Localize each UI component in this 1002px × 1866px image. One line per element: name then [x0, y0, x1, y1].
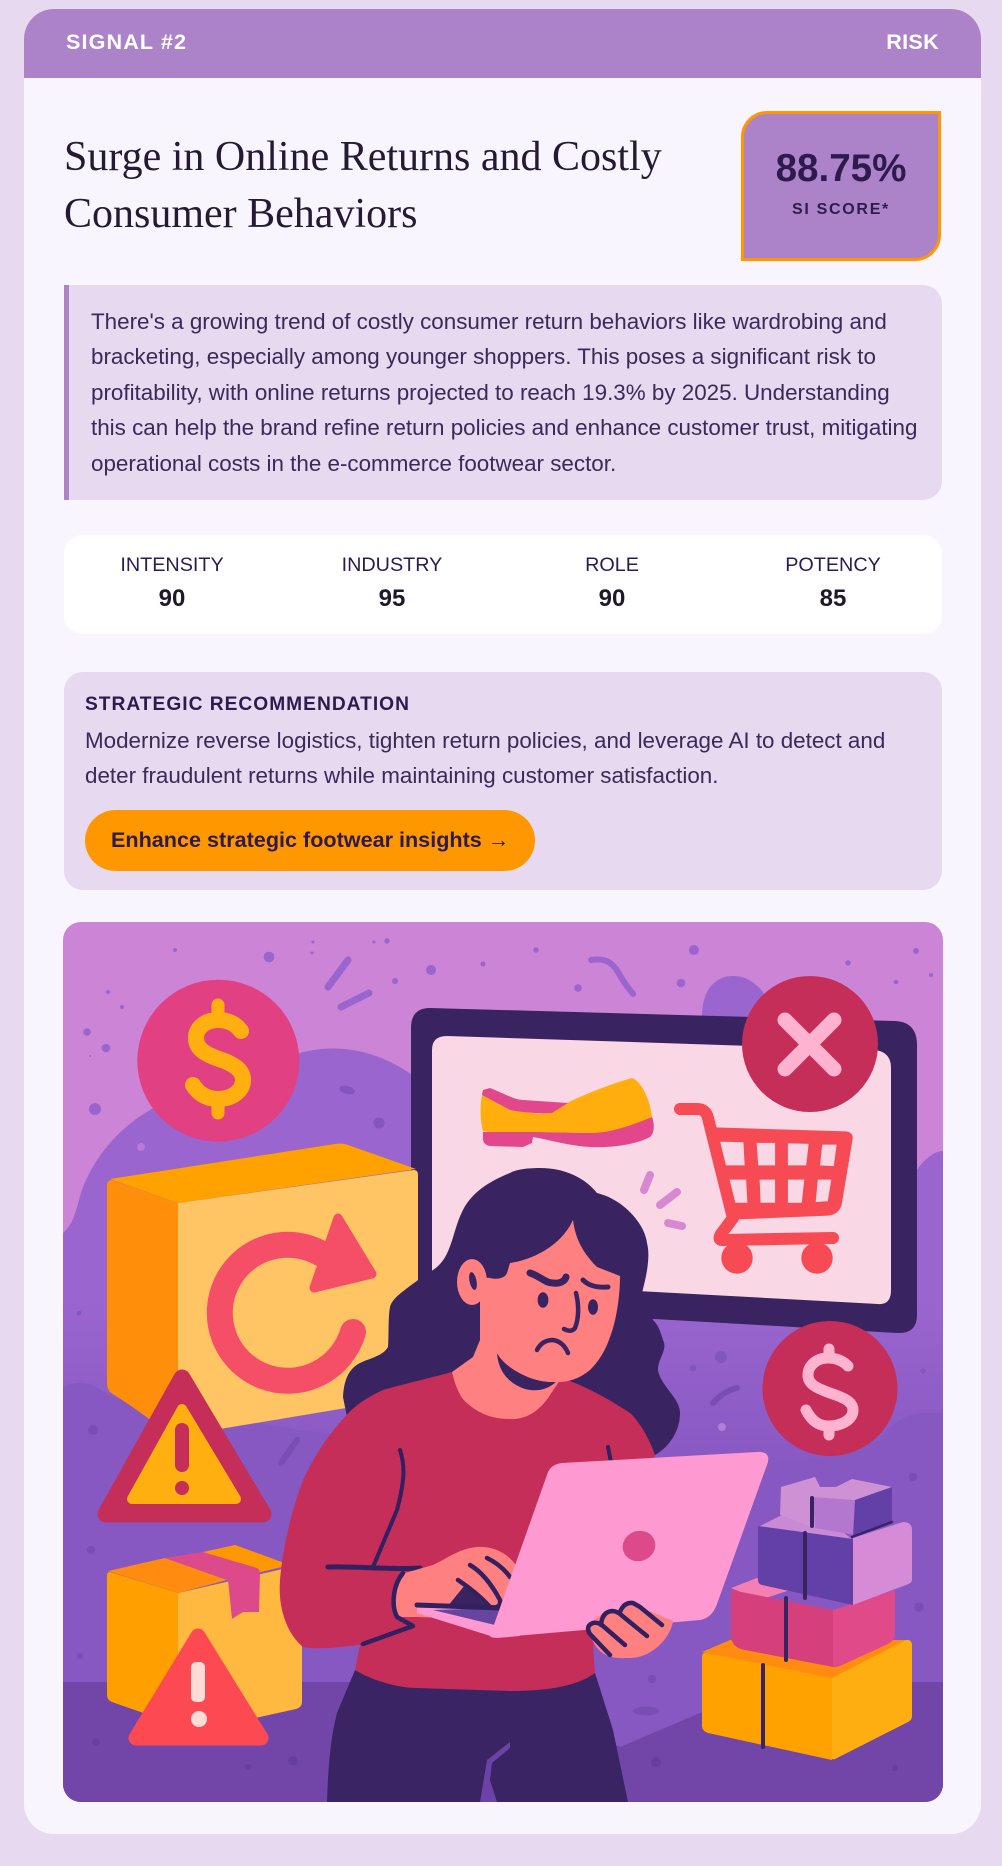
left hand — [394, 1547, 520, 1620]
icon: warning triangle crimson — [106, 1378, 263, 1514]
score label: SI SCORE* — [792, 201, 890, 218]
header bar — [24, 9, 981, 78]
stat: industry — [342, 554, 442, 612]
button label: Enhance strategic footwear insights → — [111, 827, 509, 852]
stat: industry: INDUSTRY — [342, 554, 442, 576]
stat: intensity: 90 — [159, 585, 185, 612]
stat: industry: 95 — [379, 585, 405, 612]
stat: role: 90 — [599, 585, 625, 612]
speckles — [77, 938, 933, 1771]
icon: warning triangle red — [136, 1636, 261, 1738]
stat: potency: POTENCY — [785, 554, 881, 576]
parcel box with tape — [107, 1545, 302, 1735]
stat: role — [585, 554, 639, 612]
icon: shoe — [481, 1078, 654, 1147]
description text: There's a growing trend of costly consumer return behaviors like wardrobing and — [91, 309, 887, 334]
facial features — [530, 1273, 608, 1353]
description panel — [64, 285, 942, 500]
stat: potency: 85 — [820, 585, 846, 612]
icon: dollar coin crimson — [762, 1321, 898, 1456]
stat: intensity: INTENSITY — [120, 554, 224, 576]
stacked boxes — [702, 1477, 912, 1760]
title: Surge in Online Returns and Costly — [64, 134, 662, 180]
box with return arrow — [107, 1144, 418, 1440]
icon: dollar coin pink — [137, 980, 299, 1142]
header label: category: RISK — [886, 29, 939, 54]
stat: potency — [785, 554, 881, 612]
call-to-action button — [85, 810, 535, 871]
description text: bracketing, especially among younger shoppers. This poses a significant risk to — [91, 344, 876, 369]
pants — [327, 1670, 628, 1802]
pink box — [731, 1578, 895, 1667]
score value: 88.75% — [776, 147, 906, 190]
recommendation heading: STRATEGIC RECOMMENDATION — [85, 694, 410, 715]
neck — [452, 1306, 558, 1420]
laptop keyboard — [417, 1585, 520, 1638]
purple box — [758, 1510, 912, 1605]
icon: return arrow — [220, 1218, 372, 1381]
score badge — [741, 111, 941, 261]
left fingers — [363, 1558, 510, 1644]
recommendation text: Modernize reverse logistics, tighten return policies, and leverage AI to detect and — [85, 728, 885, 753]
recommendation text: deter fraudulent returns while maintaining customer satisfaction. — [85, 763, 718, 788]
stat: role: ROLE — [585, 554, 639, 576]
illustration — [63, 922, 943, 1802]
sweater lines — [328, 1447, 611, 1569]
yellow box — [702, 1640, 912, 1760]
description text — [91, 309, 917, 476]
description text: operational costs in the e-commerce footwear sector. — [91, 451, 616, 476]
ear — [457, 1259, 487, 1305]
stats panel — [64, 535, 942, 634]
description text: profitability, with online returns projected to reach 19.3% by 2025. Understanding — [91, 380, 890, 405]
sparks — [644, 1175, 682, 1226]
small box — [780, 1477, 892, 1537]
face — [480, 1220, 620, 1382]
right hand — [588, 1603, 673, 1658]
header label: signal number: SIGNAL #2 — [66, 29, 187, 54]
recommendation panel — [64, 672, 942, 890]
icon: X circle — [742, 976, 878, 1112]
sweater — [280, 1372, 655, 1691]
background — [63, 922, 943, 1802]
monitor — [411, 1008, 917, 1333]
laptop lid — [490, 1452, 768, 1638]
title — [64, 134, 662, 237]
stat: intensity — [120, 554, 224, 612]
description text: this can help the brand refine return policies and enhance customer trust, mitigating — [91, 415, 917, 440]
hair — [343, 1168, 680, 1455]
person — [280, 1168, 768, 1802]
title: Consumer Behaviors — [64, 191, 417, 237]
recommendation text — [85, 728, 885, 788]
icon: shopping cart — [680, 1109, 852, 1274]
